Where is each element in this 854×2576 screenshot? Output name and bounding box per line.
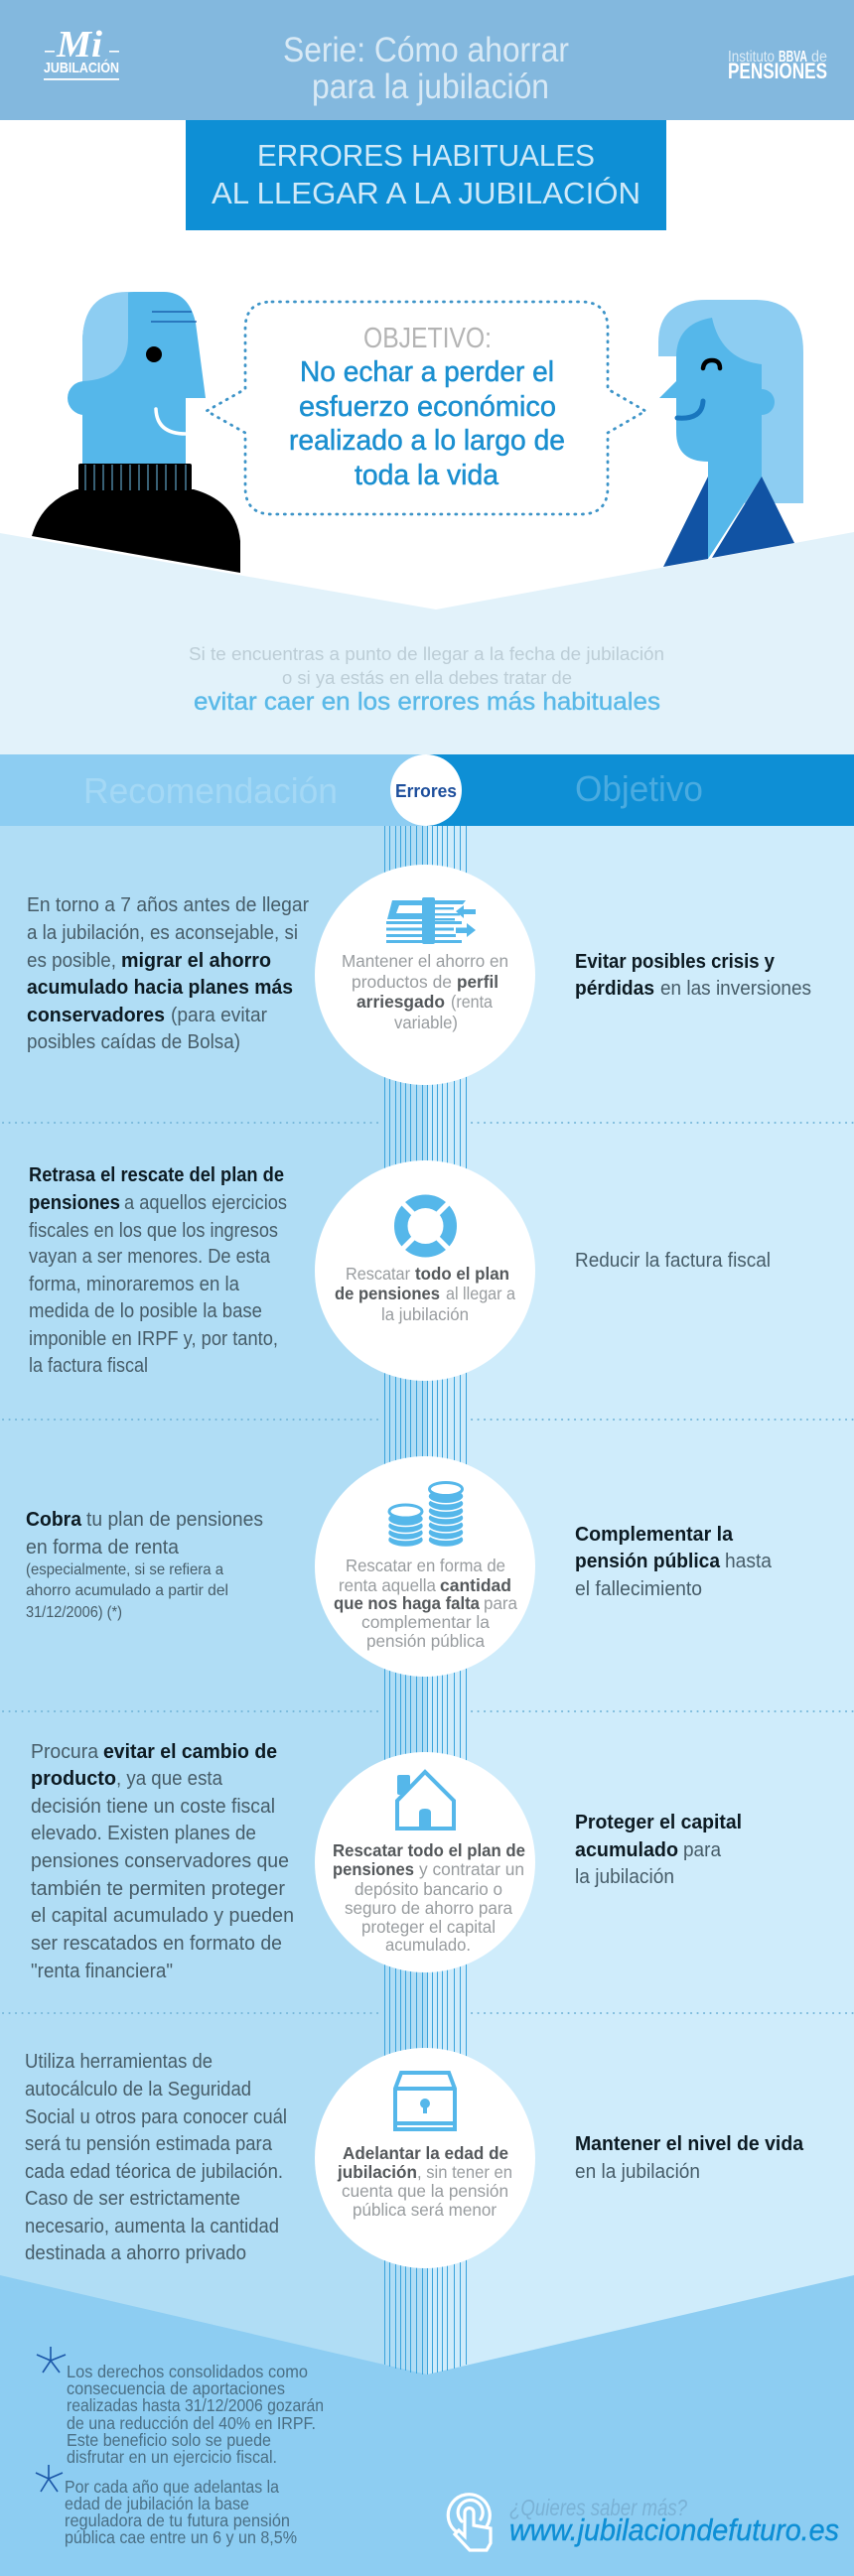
error text: y contratar un	[419, 1859, 524, 1879]
row 3: recommendation	[26, 1509, 263, 1621]
row 2: recommendation: imponible en IRPF y, por tanto,	[29, 1328, 278, 1350]
icon: lifebuoy	[401, 1201, 450, 1251]
error text: cuenta que la pensión	[342, 2181, 508, 2201]
error text: perfil	[457, 972, 498, 992]
logo: Mi Jubilación: JUBILACIÓN	[44, 59, 119, 76]
error text: para	[484, 1593, 517, 1613]
row 5: recommendation: será tu pensión estimada para	[25, 2133, 273, 2155]
row 2: recommendation: pensiones	[29, 1192, 120, 1214]
row 4: recommendation: elevado. Existen planes de	[31, 1823, 256, 1844]
footnote 2: reguladora de tu futura pensión	[65, 2510, 290, 2530]
error text: arriesgado	[356, 992, 445, 1012]
error text: renta aquella	[339, 1575, 436, 1595]
table header band	[0, 754, 854, 826]
icon: coin stacks	[387, 1483, 464, 1547]
row 4: recommendation: "renta financiera"	[31, 1961, 173, 1982]
row 5: recommendation: destinada a ahorro privado	[25, 2242, 246, 2264]
error text: jubilación	[337, 2162, 417, 2182]
error text: productos de	[352, 972, 452, 992]
header badge: Errores: Errores	[395, 780, 457, 801]
footnote 2: edad de jubilación la base	[65, 2494, 249, 2513]
logo: Instituto BBVA de Pensiones: Instituto	[728, 49, 775, 66]
row 3: error circle	[315, 1456, 535, 1677]
error text: seguro de ahorro para	[345, 1898, 512, 1918]
footnote 1: Este beneficio solo se puede	[67, 2430, 271, 2450]
row 2: recommendation: Retrasa el rescate del plan de	[29, 1164, 284, 1186]
error text: proteger el capital	[361, 1917, 496, 1937]
row 4: recommendation: pensiones conservadores que	[31, 1850, 289, 1872]
error text: Rescatar todo el plan de	[333, 1840, 525, 1860]
error text: complementar la	[361, 1612, 490, 1632]
row 5: recommendation: necesario, aumenta la cantidad	[25, 2216, 279, 2237]
logo: Instituto BBVA de Pensiones	[728, 49, 827, 83]
error text: cantidad	[440, 1575, 511, 1595]
intro text: o si ya estás en ella debes tratar de	[282, 668, 572, 688]
title box: ERRORES HABITUALES	[257, 138, 595, 173]
footnote 1: de una reducción del 40% en IRPF.	[67, 2413, 316, 2433]
error text	[335, 1264, 515, 1324]
row 1: recommendation: migrar el ahorro	[121, 950, 271, 972]
series heading	[283, 31, 569, 106]
row 3: recommendation: Cobra	[26, 1509, 82, 1531]
column backgrounds	[0, 826, 854, 2384]
row 3: objective: el fallecimiento	[575, 1578, 702, 1600]
footnote 1 asterisk	[37, 2347, 66, 2373]
row 5: objective	[575, 2133, 804, 2183]
error text: pública será menor	[353, 2200, 497, 2220]
row 3: recommendation: (especialmente, si se refiera a	[26, 1561, 223, 1578]
row 2: recommendation: a aquellos ejercicios	[124, 1192, 287, 1214]
row 4: recommendation: evitar el cambio de	[103, 1741, 277, 1763]
logo: Instituto BBVA de Pensiones: BBVA	[779, 49, 807, 66]
footnote 1: realizadas hasta 31/12/2006 gozarán	[67, 2395, 324, 2415]
row 3: recommendation: en forma de renta	[26, 1537, 180, 1559]
row 1: recommendation: En torno a 7 años antes de llegar	[27, 894, 309, 916]
error text: al llegar a	[446, 1284, 515, 1303]
row 2: recommendation	[29, 1164, 287, 1377]
intro text	[189, 644, 664, 716]
footnote 1	[67, 2362, 324, 2467]
row 4: recommendation: , ya que esta	[116, 1768, 223, 1790]
header badge: Errores	[390, 754, 462, 826]
row 1: recommendation: conservadores	[27, 1005, 165, 1026]
intro text: Si te encuentras a punto de llegar a la fecha de jubilación	[189, 644, 664, 664]
dotted row dividers	[3, 1123, 854, 2013]
logo: Mi Jubilación: Mi	[56, 24, 102, 66]
row 4: objective: acumulado	[575, 1839, 678, 1861]
row 1: error circle	[315, 865, 535, 1085]
error text: que nos haga falta	[334, 1593, 480, 1613]
logo: Instituto BBVA de Pensiones: PENSIONES	[728, 59, 827, 83]
row 3: objective	[575, 1524, 773, 1600]
row 3: objective: pensión pública	[575, 1551, 721, 1572]
icon: money stacks with arrows	[386, 897, 476, 944]
error text: Mantener el ahorro en	[342, 951, 508, 971]
error text: todo el plan	[415, 1264, 509, 1284]
footnote 2: Por cada año que adelantas la	[65, 2477, 279, 2497]
icon: house	[397, 1772, 454, 1829]
row 4: objective: para	[683, 1839, 722, 1861]
speech bubble	[207, 302, 645, 514]
row 5: objective: en la jubilación	[575, 2161, 700, 2183]
objective label: OBJETIVO:	[363, 323, 492, 354]
header: Objetivo: Objetivo	[575, 768, 703, 809]
row 5: recommendation: cada edad téorica de jubilación.	[25, 2161, 283, 2183]
row 5: recommendation	[25, 2051, 287, 2264]
header band	[0, 0, 854, 120]
row 2: objective: Reducir la factura fiscal	[575, 1250, 771, 1272]
row 4: recommendation: ser rescatados en formato de	[31, 1933, 282, 1955]
row 1: objective: en las inversiones	[660, 978, 811, 1000]
error text	[333, 1840, 525, 1955]
row 2: recommendation: fiscales en los que los ingresos	[29, 1220, 278, 1242]
row 3: recommendation: 31/12/2006) (*)	[26, 1604, 122, 1621]
row 4: objective	[575, 1812, 742, 1888]
pale background wedge	[0, 532, 854, 754]
error text: acumulado.	[385, 1935, 471, 1955]
row 3: recommendation: ahorro acumulado a partir del	[26, 1582, 228, 1599]
error text: de pensiones	[335, 1284, 440, 1303]
row 4: error circle	[315, 1752, 535, 1972]
objective statement: No echar a perder el	[300, 356, 554, 388]
row 5: recommendation: Social u otros para conocer cuál	[25, 2106, 287, 2128]
row 3: objective: hasta	[725, 1551, 773, 1572]
central stripes	[385, 826, 467, 2374]
row 1: objective: pérdidas	[575, 978, 654, 1000]
intro text: evitar caer en los errores más habituales	[194, 688, 660, 716]
error text: Rescatar en forma de	[346, 1556, 505, 1575]
error text: Rescatar	[346, 1264, 410, 1284]
error text: (renta	[451, 992, 493, 1012]
row 4: recommendation: decisión tiene un coste fiscal	[31, 1796, 275, 1818]
illustration: woman	[658, 300, 803, 567]
error text: depósito bancario o	[355, 1879, 502, 1899]
row 1: recommendation: acumulado hacia planes más	[27, 977, 293, 999]
icon: tapping hand	[448, 2495, 491, 2550]
title box	[186, 120, 666, 230]
row 1: objective: Evitar posibles crisis y	[575, 951, 776, 973]
row 4: objective: Proteger el capital	[575, 1812, 742, 1833]
objective statement	[289, 356, 565, 491]
footnote 1: consecuencia de aportaciones	[67, 2378, 285, 2398]
row 1: objective	[575, 951, 811, 1000]
call to action: ¿Quieres saber más?	[509, 2495, 687, 2520]
error text	[342, 951, 508, 1032]
row 1: recommendation: (para evitar	[171, 1005, 267, 1026]
row 4: recommendation: Procura	[31, 1741, 99, 1763]
footer panel background	[0, 2275, 854, 2576]
row 4: recommendation	[31, 1741, 294, 1982]
footnote 2 asterisk	[36, 2465, 63, 2492]
objective statement: esfuerzo económico	[299, 391, 556, 423]
row 2: recommendation: medida de lo posible la base	[29, 1300, 262, 1322]
call to action	[509, 2495, 839, 2547]
row 1: recommendation: a la jubilación, es aconsejable, si	[27, 922, 298, 944]
row 3: recommendation: tu plan de pensiones	[86, 1509, 263, 1531]
error text: , sin tener en	[417, 2162, 512, 2182]
row 1: recommendation: es posible,	[27, 950, 116, 972]
error text: pensión pública	[366, 1631, 485, 1651]
row 2: recommendation: la factura fiscal	[29, 1355, 148, 1377]
logo: Mi Jubilación	[44, 24, 119, 80]
header: Recomendación: Recomendación	[83, 770, 338, 811]
footnote 1: disfrutar en un ejercicio fiscal.	[67, 2447, 277, 2467]
error text: Adelantar la edad de	[343, 2143, 508, 2163]
row 5: objective: Mantener el nivel de vida	[575, 2133, 804, 2155]
row 5: recommendation: Utiliza herramientas de	[25, 2051, 213, 2073]
footnote 2	[65, 2477, 297, 2547]
icon: chest	[395, 2073, 455, 2129]
logo: Instituto BBVA de Pensiones: de	[811, 49, 827, 66]
row 3: objective: Complementar la	[575, 1524, 734, 1546]
illustration: man	[32, 292, 240, 573]
row 4: recommendation: el capital acumulado y pueden	[31, 1905, 294, 1927]
error text: pensiones	[333, 1859, 414, 1879]
row 5: recommendation: Caso de ser estrictamente	[25, 2188, 240, 2210]
footnote 1: Los derechos consolidados como	[67, 2362, 308, 2381]
title box: AL LLEGAR A LA JUBILACIÓN	[212, 176, 640, 210]
row 1: recommendation	[27, 894, 309, 1053]
series heading: Serie: Cómo ahorrar	[283, 31, 569, 69]
error text: variable)	[394, 1013, 458, 1032]
row 4: objective: la jubilación	[575, 1866, 674, 1888]
error text: la jubilación	[381, 1304, 469, 1324]
series heading: para la jubilación	[312, 68, 549, 106]
error text	[337, 2143, 512, 2220]
objective statement: toda la vida	[355, 460, 499, 491]
row 2: recommendation: forma, minoraremos en la	[29, 1274, 240, 1295]
row 4: recommendation: también te permiten proteger	[31, 1878, 285, 1900]
row 1: recommendation: posibles caídas de Bolsa)	[27, 1031, 240, 1053]
row 4: recommendation: producto	[31, 1768, 116, 1790]
row 2: recommendation: vayan a ser menores. De esta	[29, 1246, 271, 1268]
row 5: recommendation: autocálculo de la Seguridad	[25, 2079, 251, 2101]
objective statement: realizado a lo largo de	[289, 425, 565, 457]
footnote 2: pública cae entre un 6 y un 8,5%	[65, 2527, 297, 2547]
error text	[334, 1556, 517, 1651]
row 5: error circle	[315, 2048, 535, 2268]
row 2: error circle	[315, 1160, 535, 1381]
